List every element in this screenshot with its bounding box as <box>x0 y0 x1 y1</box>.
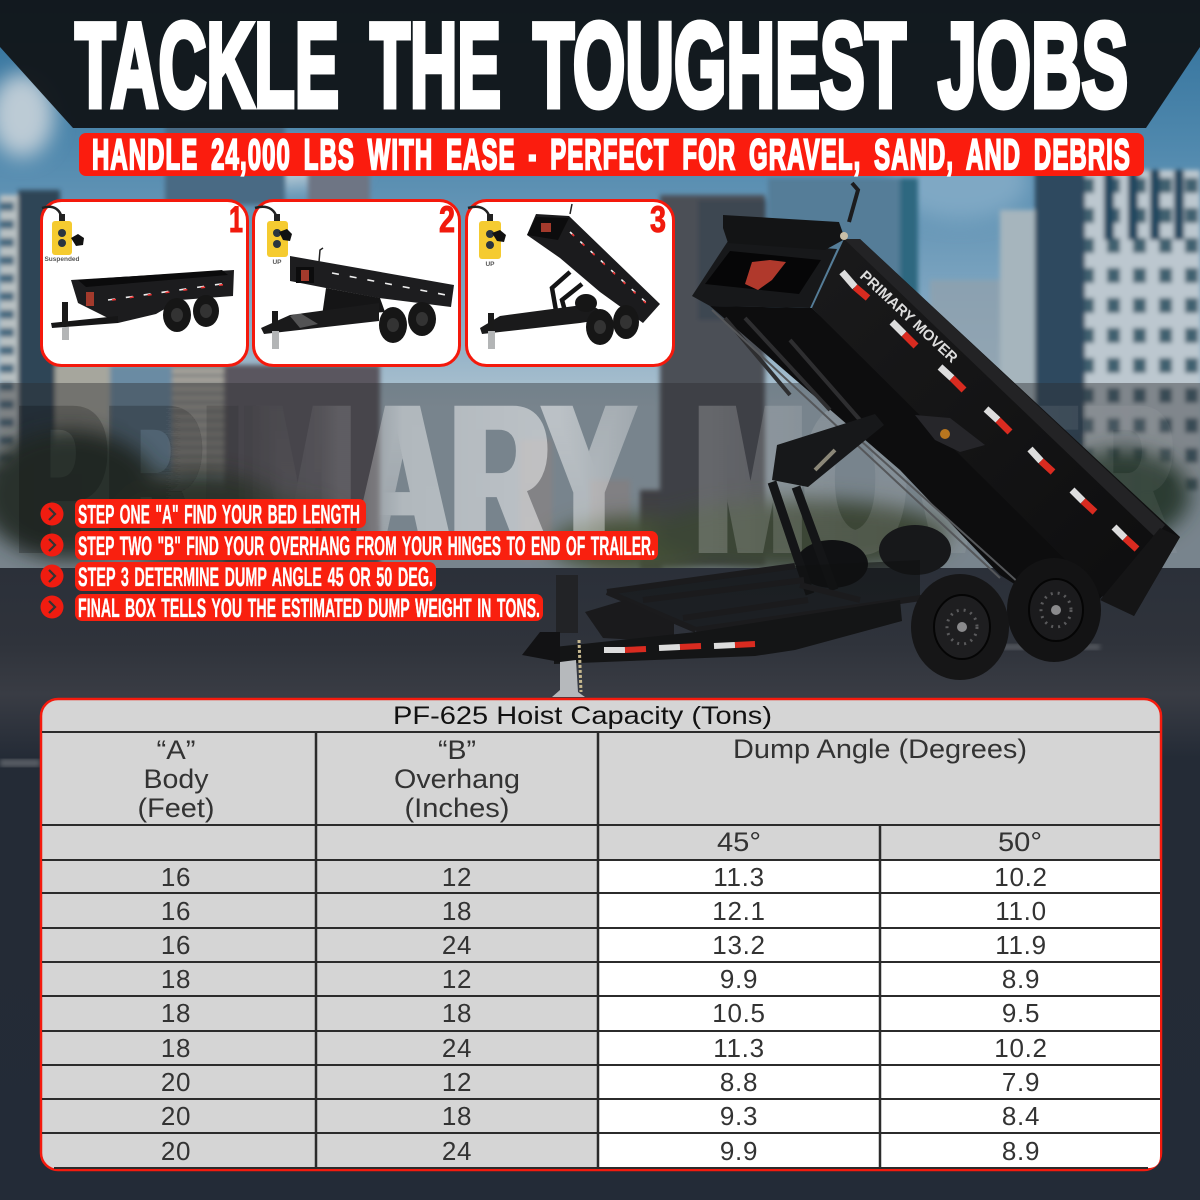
icon: yellow pendant control pressed: UP <box>272 259 282 266</box>
angle sub headers: 50° <box>998 827 1042 857</box>
table data rows: 12 <box>442 964 472 994</box>
dump bed headboard <box>692 183 858 308</box>
table data rows: 13.2 <box>712 930 766 960</box>
table data rows: 11.3 <box>713 862 765 892</box>
table data rows: 20 <box>161 1067 191 1097</box>
icon: trailer fully raised <box>480 204 660 349</box>
table data rows: 24 <box>442 930 472 960</box>
title <box>75 0 1128 132</box>
angle sub headers: 45° <box>717 827 761 857</box>
header banner <box>0 0 1200 132</box>
dump bed underside <box>710 306 1107 625</box>
table data rows: 11.9 <box>995 930 1047 960</box>
trailer frame and tongue <box>522 560 935 697</box>
step list <box>40 499 658 623</box>
table data rows: 20 <box>161 1101 191 1131</box>
column header A: “A” <box>156 735 196 765</box>
table title: PF-625 Hoist Capacity (Tons) <box>393 702 772 730</box>
table data rows: 12 <box>442 862 472 892</box>
table data rows: 16 <box>161 896 191 926</box>
step two: STEP TWO "B" FIND YOUR OVERHANG FROM YOUR HINGES TO END OF TRAILER. <box>78 531 655 561</box>
table data rows: 10.2 <box>994 1033 1048 1063</box>
icon: yellow pendant control pressed <box>255 207 292 266</box>
angle sub headers <box>717 827 1042 857</box>
icon: trailer lowered <box>51 270 234 340</box>
step two <box>40 531 658 561</box>
table data rows: 16 <box>161 930 191 960</box>
step three <box>40 562 436 592</box>
column header B: “B” <box>438 735 476 765</box>
step one <box>40 499 366 530</box>
table data rows: 8.9 <box>1002 964 1040 994</box>
column header dump angle: Dump Angle (Degrees) <box>733 734 1027 764</box>
tandem wheels <box>911 558 1101 680</box>
table data rows: 9.5 <box>1002 998 1040 1028</box>
table rules <box>42 732 1160 1168</box>
table data rows: 9.9 <box>720 1136 758 1166</box>
table data rows: 9.3 <box>720 1101 758 1131</box>
table data rows: 20 <box>161 1136 191 1166</box>
icon: trailer partly raised <box>261 248 454 349</box>
hoist capacity table <box>41 699 1161 1170</box>
title: TACKLE <box>75 0 339 132</box>
step number 1: 1 <box>229 199 243 240</box>
step number 3: 3 <box>650 199 666 240</box>
frame reflectors <box>604 644 755 650</box>
step four <box>40 593 543 623</box>
column header A: (Feet) <box>138 793 214 823</box>
table data rows: 8.9 <box>1002 1136 1040 1166</box>
table data rows: 24 <box>442 1136 472 1166</box>
brand text on bed: PRIMARY MOVER <box>856 267 961 367</box>
table data rows: 24 <box>442 1033 472 1063</box>
panel: step 2 partly raised trailer <box>254 199 460 366</box>
table data rows <box>161 862 1048 1166</box>
title: TOUGHEST <box>533 0 906 132</box>
title: THE <box>370 0 501 132</box>
table data rows: 7.9 <box>1002 1067 1040 1097</box>
column header A: Body <box>144 764 209 794</box>
step four: FINAL BOX TELLS YOU THE ESTIMATED DUMP WEIGHT IN TONS. <box>78 593 540 623</box>
panel: step 1 lowered trailer <box>42 199 248 366</box>
table data rows: 8.8 <box>720 1067 758 1097</box>
white data cells <box>598 860 1160 1168</box>
table data rows: 18 <box>442 1101 472 1131</box>
column header A <box>138 735 214 823</box>
table data rows: 9.9 <box>720 964 758 994</box>
side reflectors <box>842 272 1137 549</box>
table data rows: 10.2 <box>994 862 1048 892</box>
step number 2: 2 <box>439 199 455 240</box>
rear background wheels <box>796 525 951 588</box>
icon: yellow pendant control with hand: Suspended <box>44 256 80 263</box>
step one: STEP ONE "A" FIND YOUR BED LENGTH <box>78 500 360 530</box>
column header B <box>394 735 520 823</box>
icon: yellow pendant control up <box>468 207 506 268</box>
panel: step 3 fully raised trailer <box>466 199 674 366</box>
scissor hoist <box>772 414 884 594</box>
icon: yellow pendant control up: UP <box>485 261 495 268</box>
main image: tilted dump trailer <box>522 183 1180 697</box>
table data rows: 12 <box>442 1067 472 1097</box>
column header B: Overhang <box>394 764 520 794</box>
table data rows: 18 <box>161 964 191 994</box>
icon: yellow pendant control with hand <box>42 207 84 263</box>
step three: STEP 3 DETERMINE DUMP ANGLE 45 OR 50 DEG. <box>78 562 433 592</box>
table data rows: 16 <box>161 862 191 892</box>
table data rows: 18 <box>442 998 472 1028</box>
table data rows: 10.5 <box>712 998 766 1028</box>
table data rows: 18 <box>161 998 191 1028</box>
column header B: (Inches) <box>404 793 510 823</box>
table data rows: 12.1 <box>712 896 766 926</box>
dump bed side <box>812 239 1180 616</box>
table data rows: 8.4 <box>1002 1101 1040 1131</box>
table data rows: 11.0 <box>995 896 1047 926</box>
table data rows: 11.3 <box>713 1033 765 1063</box>
table data rows: 18 <box>442 896 472 926</box>
table data rows: 18 <box>161 1033 191 1063</box>
watermark band with PRIMARY MOVER ghost text: PRIMARY <box>16 360 634 599</box>
